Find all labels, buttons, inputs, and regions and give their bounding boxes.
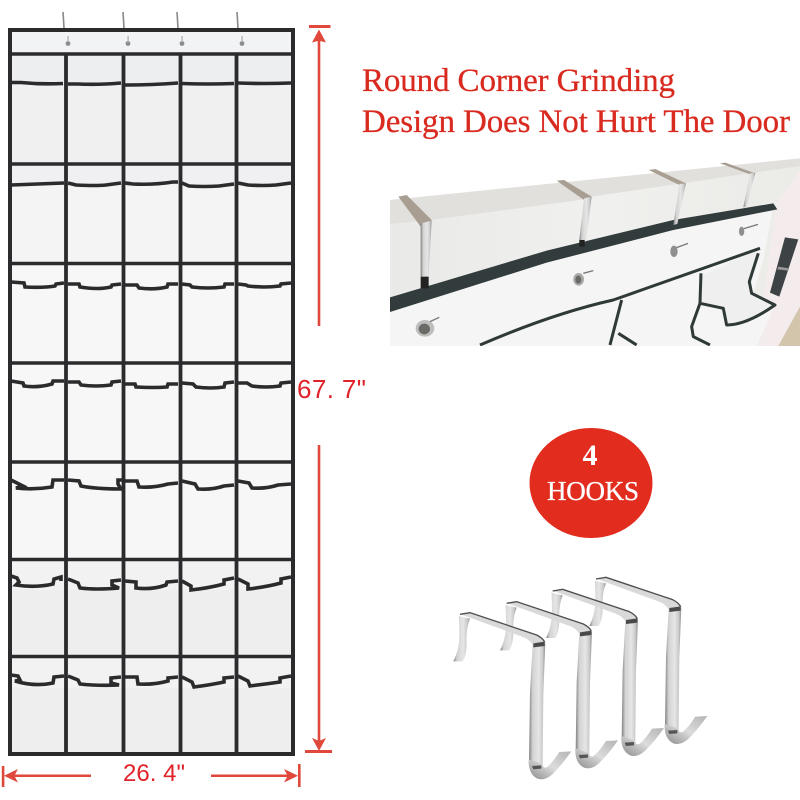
fabric panel [9, 29, 294, 755]
badge: 4 hooks [530, 428, 652, 538]
height label: 67. 7" [297, 374, 366, 404]
height dimension arrow [305, 25, 332, 753]
fabric [390, 207, 775, 346]
width label: 26. 4" [123, 760, 185, 787]
grommets [416, 224, 758, 337]
photo: hooks on door [390, 158, 800, 346]
organizer frame and grid [9, 30, 294, 754]
heading [362, 63, 790, 140]
fabric binding [390, 203, 777, 312]
badge: 4 hooks: 4 [582, 439, 598, 472]
badge: 4 hooks: HOOKS [547, 476, 639, 506]
shoe organizer [9, 12, 294, 755]
organizer grommets [66, 36, 244, 46]
organizer hooks [63, 12, 238, 28]
heading: Round Corner Grinding [362, 63, 675, 99]
width dimension arrow [2, 764, 301, 787]
photo: four metal hooks [453, 577, 707, 779]
heading: Design Does Not Hurt The Door [362, 104, 790, 140]
door [390, 166, 800, 298]
pocket edges [11, 82, 291, 687]
door hooks [398, 163, 755, 288]
door edge and hinge [761, 172, 800, 346]
